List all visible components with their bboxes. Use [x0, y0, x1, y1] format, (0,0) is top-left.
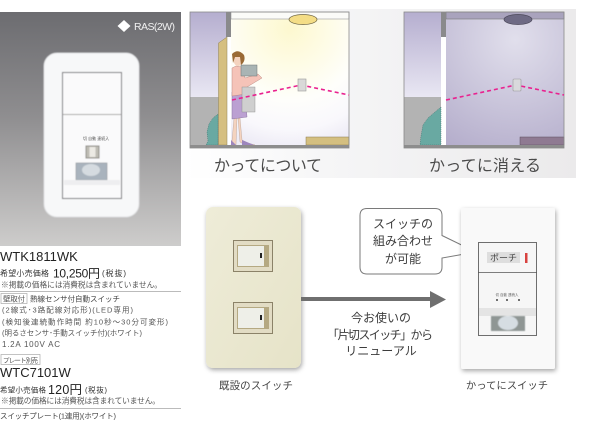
indicator labels: 切 自動 連続入 [496, 292, 519, 297]
text block: WTK1811WK: (2線式･3路配線対応形)(LED専用) [2, 304, 134, 314]
text block: WTK1811WK: 熱線センサ付自動スイッチ [30, 294, 120, 304]
text block: WTK1811WK: (明るさセンサ･手動スイッチ付)(ホワイト) [2, 328, 142, 338]
caption: turns off: かってに消える [429, 157, 541, 175]
ceiling light on [289, 14, 317, 24]
text block: WTK1811WK: 壁取付 [3, 294, 26, 304]
sensor detection beam [232, 85, 349, 100]
red indicator [525, 253, 528, 263]
panel: room illustrations background [185, 9, 576, 178]
text block: renewal note [327, 310, 433, 358]
text block: WTC7101W [0, 354, 181, 420]
ceiling light off [504, 14, 532, 24]
text block: WTK1811WK [0, 246, 181, 349]
text block: WTK1811WK: 1.2A 100V AC [2, 340, 60, 349]
callout: switch combinations: が可能 [385, 251, 421, 266]
person carrying boxes and bags [231, 51, 262, 145]
text block: WTC7101W: WTC7101W [0, 365, 72, 380]
callout: switch combinations: スイッチの [373, 217, 433, 231]
new sensor switch plate [461, 208, 555, 369]
arrow [301, 291, 446, 308]
label: sensor switch: かってにスイッチ [466, 380, 548, 392]
furniture [306, 137, 349, 145]
indicator dots [496, 299, 520, 301]
furniture [520, 137, 564, 145]
callout: switch combinations: 組み合わせ [373, 234, 433, 248]
panel: product photo [0, 12, 181, 245]
label: existing switch: 既設のスイッチ [219, 380, 293, 392]
text block: WTK1811WK: (検知後連続動作時間 約10秒～30分可変形) [2, 316, 168, 326]
text block: renewal note: リニューアル [345, 344, 417, 358]
plant [206, 114, 218, 145]
callout: switch combinations [360, 208, 476, 274]
text block: WTK1811WK: WTK1811WK [0, 249, 78, 264]
porch label [487, 252, 520, 263]
lower toggle switch [234, 302, 272, 334]
text block: WTK1811WK: 希望小売価格 [0, 268, 49, 278]
illustration: room with light on [190, 12, 349, 148]
illustration: room with light off [404, 12, 564, 148]
upper toggle switch [234, 240, 272, 272]
icon: diamond [118, 20, 130, 32]
label: RAS(2W): RAS(2W) [134, 21, 175, 33]
text block: WTC7101W: ※掲載の価格には消費税は含まれていません。 [1, 396, 160, 406]
sensor detection beam [446, 85, 564, 100]
new sensor switch plate: ポーチ [490, 253, 517, 263]
sensor switch plate [44, 53, 139, 217]
text block: WTK1811WK: ※掲載の価格には消費税は含まれていません。 [1, 280, 162, 290]
plate tiny labels: 切 自動 連続入 [83, 135, 109, 141]
text block: WTC7101W: 120円 [48, 383, 82, 397]
caption: turns on: かってについて [214, 158, 322, 175]
text block: WTC7101W: スイッチプレート(1連用)(ホワイト) [0, 410, 116, 420]
text block: renewal note: 「片切スイッチ」から [327, 328, 433, 342]
sensor window [491, 316, 525, 331]
text block: renewal note: 今お使いの [351, 310, 411, 325]
wall switch [513, 79, 521, 91]
text block: WTC7101W: プレート別売 [3, 356, 38, 364]
plant [420, 107, 441, 145]
existing switch plate [206, 207, 301, 368]
wall switch [298, 79, 306, 91]
text block: WTC7101W: (税抜) [85, 384, 108, 394]
open door [218, 37, 227, 145]
text block: WTC7101W: 希望小売価格 [0, 384, 46, 394]
text block: WTK1811WK: 10,250円 [53, 266, 100, 280]
text block: WTK1811WK: (税抜) [102, 268, 126, 278]
